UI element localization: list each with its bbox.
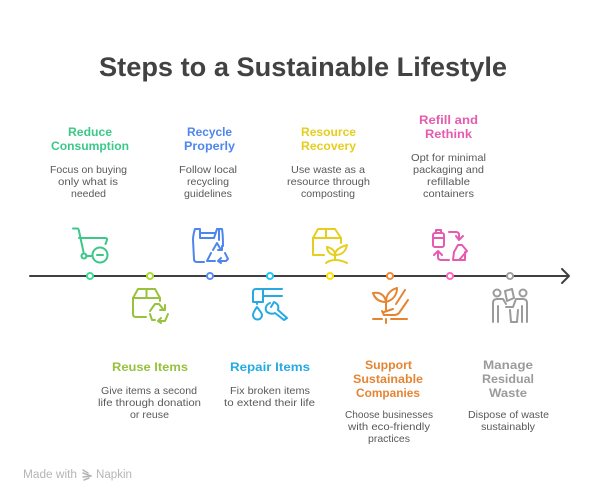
heading: Reduce Consumption — [51, 125, 129, 153]
icon: hand holding a sprout — [373, 288, 408, 323]
text: Refill and Rethink description: packaging and — [413, 164, 484, 176]
heading: Reduce Consumption: Reduce — [68, 125, 112, 139]
text: Refill and Rethink description: refillable — [427, 176, 470, 188]
icon: two people handling waste — [493, 289, 527, 322]
text: Manage Residual Waste description: sustainably — [481, 421, 536, 433]
timeline arrow — [30, 269, 569, 283]
watermark: Made with Napkin — [23, 469, 132, 481]
timeline dot — [447, 273, 453, 279]
heading: Support Sustainable Companies — [353, 358, 423, 400]
heading: Manage Residual Waste — [482, 358, 534, 400]
heading: Support Sustainable Companies: Support — [365, 358, 412, 372]
step 2: Reuse Items — [98, 273, 201, 421]
heading: Refill and Rethink: Rethink — [425, 127, 472, 141]
heading: Reuse Items: Reuse Items — [112, 360, 188, 374]
text: Refill and Rethink description: Opt for minimal — [411, 152, 486, 164]
text: Repair Items description: Fix broken items — [230, 385, 310, 397]
text: Resource Recovery description: composting — [301, 188, 355, 200]
text: Recycle Properly description — [179, 164, 237, 200]
text: Resource Recovery description: resource through — [287, 176, 370, 188]
step 1: Reduce Consumption — [50, 125, 129, 279]
heading: Support Sustainable Companies: Sustainable — [353, 372, 423, 386]
icon: plastic bag with recycling symbol — [193, 229, 228, 263]
heading: Recycle Properly: Properly — [184, 139, 235, 153]
watermark: Made with Napkin: Napkin — [96, 469, 132, 481]
heading: Reduce Consumption: Consumption — [51, 139, 129, 153]
text: Reuse Items description: Give items a second — [101, 385, 197, 397]
timeline dot — [147, 273, 153, 279]
text: Reduce Consumption description: needed — [71, 188, 106, 200]
timeline dot — [87, 273, 93, 279]
timeline dot — [207, 273, 213, 279]
heading: Recycle Properly: Recycle — [187, 125, 232, 139]
heading: Repair Items: Repair Items — [230, 360, 310, 374]
heading: Support Sustainable Companies: Companies — [356, 386, 420, 400]
heading: Refill and Rethink — [419, 113, 478, 141]
icon: shopping cart with minus — [73, 228, 108, 262]
step 3: Recycle Properly — [179, 125, 237, 279]
icon: box with sprout — [313, 229, 347, 263]
heading: Resource Recovery: Resource — [301, 125, 356, 139]
title: Steps to a Sustainable Lifestyle — [99, 52, 507, 82]
text: Reuse Items description: life through donation — [98, 397, 201, 409]
step 7: Refill and Rethink — [411, 113, 486, 279]
timeline dot — [507, 273, 513, 279]
text: Refill and Rethink description: containers — [423, 188, 474, 200]
heading: Manage Residual Waste: Manage — [483, 358, 533, 372]
text: Reuse Items description — [98, 385, 201, 421]
text: Reduce Consumption description: only what is — [58, 176, 118, 188]
step 6: Support Sustainable Companies — [345, 273, 433, 445]
heading: Resource Recovery — [301, 125, 356, 153]
text: Support Sustainable Companies description — [345, 409, 433, 445]
step 4: Repair Items — [224, 273, 315, 409]
icon: faucet, drop and wrench — [253, 289, 287, 320]
text: Repair Items description — [224, 385, 315, 409]
text: Support Sustainable Companies description: with eco-friendly — [347, 421, 431, 433]
text: Manage Residual Waste description — [468, 409, 549, 433]
timeline dot — [267, 273, 273, 279]
watermark: Made with Napkin: Made with — [23, 469, 77, 481]
text: Reuse Items description: or reuse — [130, 409, 169, 421]
heading: Recycle Properly — [184, 125, 235, 153]
text: Reduce Consumption description — [50, 164, 127, 200]
icon: Napkin logo — [83, 470, 91, 480]
text: Manage Residual Waste description: Dispose of waste — [468, 409, 549, 421]
text: Support Sustainable Companies description: practices — [368, 433, 410, 445]
icon: box with recycling arrows — [133, 289, 168, 323]
text: Repair Items description: to extend their life — [224, 397, 315, 409]
text: Reduce Consumption description: Focus on buying — [50, 164, 127, 176]
text: Recycle Properly description: guidelines — [184, 188, 232, 200]
text: Support Sustainable Companies description: Choose businesses — [345, 409, 433, 421]
text: Recycle Properly description: recycling — [187, 176, 229, 188]
heading: Manage Residual Waste: Waste — [489, 386, 527, 400]
heading: Resource Recovery: Recovery — [301, 139, 356, 153]
step 5: Resource Recovery — [287, 125, 370, 279]
heading: Manage Residual Waste: Residual — [482, 372, 534, 386]
text: Resource Recovery description — [287, 164, 370, 200]
text: Recycle Properly description: Follow local — [179, 164, 237, 176]
step 8: Manage Residual Waste — [468, 273, 549, 433]
icon: container and refill pouch with arrows — [433, 230, 467, 260]
text: Resource Recovery description: Use waste as a — [291, 164, 365, 176]
timeline dot — [387, 273, 393, 279]
text: Refill and Rethink description — [411, 152, 486, 200]
timeline dot — [327, 273, 333, 279]
heading: Refill and Rethink: Refill and — [419, 113, 478, 127]
